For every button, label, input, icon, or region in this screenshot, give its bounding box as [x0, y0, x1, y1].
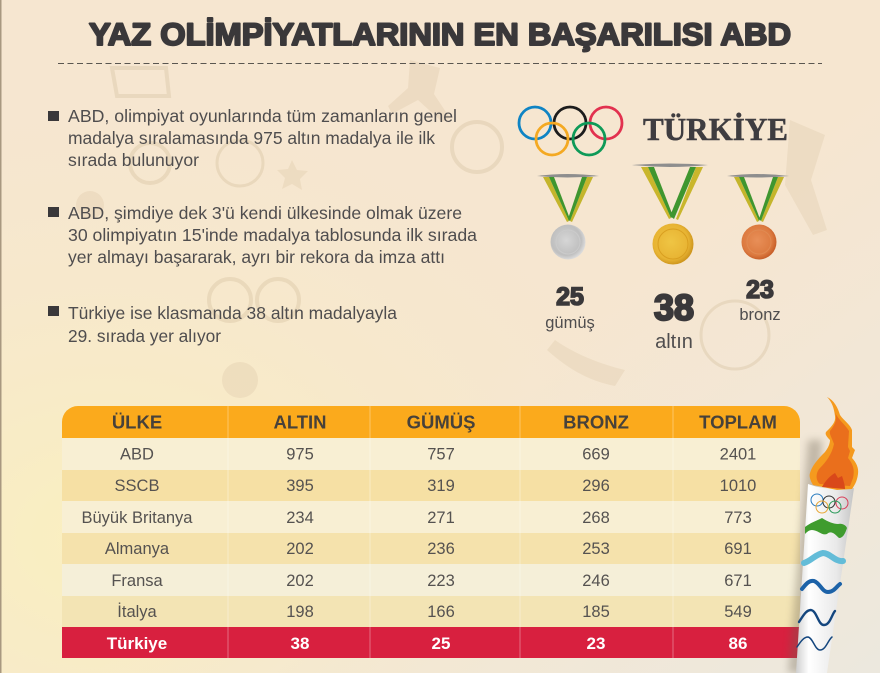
row: Almanya: 202 [286, 540, 314, 558]
row: İtalya: 198 [286, 603, 314, 621]
medal table [62, 406, 800, 658]
row: Türkiye: 23 [587, 634, 605, 653]
bullet 1 [48, 106, 457, 170]
bullet 1: sırada bulunuyor [68, 150, 199, 170]
torch water waves [797, 553, 843, 650]
medal count: silver [545, 283, 595, 332]
row: Fransa: Fransa [111, 572, 163, 590]
row: İtalya [62, 596, 800, 627]
row: Büyük Britanya: 271 [427, 509, 455, 527]
medal count: silver: 25 [556, 283, 584, 311]
row: Türkiye [62, 627, 800, 658]
title: YAZ OLİMPİYATLARININ EN BAŞARILISI ABD [89, 16, 791, 52]
row: Fransa: 202 [286, 572, 314, 590]
row: Fransa [62, 564, 800, 596]
row: ABD [62, 438, 800, 470]
row: Almanya: 236 [427, 540, 455, 558]
heading: Türkiye: TÜRKİYE [643, 111, 788, 147]
row: Büyük Britanya: Büyük Britanya [82, 509, 193, 527]
row: Fransa: 223 [427, 572, 455, 590]
bullet 3: 29. sırada yer alıyor [68, 326, 221, 346]
row: ABD: 757 [427, 446, 455, 464]
bullet 2 [48, 203, 477, 267]
table header: GÜMÜŞ [407, 412, 475, 432]
bullet 1: madalya sıralamasında 975 altın madalya ile ilk [68, 128, 435, 148]
bullet 2: 30 olimpiyatın 15'inde madalya tablosunda ilk sırada [68, 225, 477, 245]
torch rings [811, 494, 848, 513]
medal count: gold: altın [655, 331, 693, 353]
table header: TOPLAM [699, 412, 777, 432]
bullet list [48, 106, 477, 346]
bullet 2: yer almayı başararak, ayrı bir rekora da imza attı [68, 247, 445, 267]
medal count: bronze: 23 [746, 276, 774, 304]
medal: silver [537, 174, 599, 260]
row: İtalya: 185 [582, 603, 610, 621]
row: Büyük Britanya: 234 [286, 509, 314, 527]
row: Büyük Britanya: 773 [724, 509, 752, 527]
flame [810, 397, 858, 490]
row: ABD: 2401 [720, 446, 756, 464]
bullet 3: Türkiye ise klasmanda 38 altın madalyayla [68, 303, 397, 323]
torch shadow [788, 440, 822, 673]
table header: ALTIN [273, 412, 327, 432]
row: İtalya: 166 [427, 603, 455, 621]
row: Fransa: 246 [582, 572, 610, 590]
bullet 2: ABD, şimdiye dek 3'ü kendi ülkesinde olmak üzere [68, 203, 462, 223]
table header [62, 406, 800, 438]
background sport silhouettes [76, 60, 827, 540]
title divider [58, 62, 822, 64]
row: Almanya: 691 [724, 540, 752, 558]
row: Türkiye: Türkiye [107, 634, 167, 653]
torch [788, 397, 858, 673]
torch handle [796, 484, 854, 673]
row: SSCB: 319 [427, 477, 455, 495]
row: SSCB [62, 470, 800, 501]
row: Fransa: 671 [724, 572, 752, 590]
table header: ÜLKE [112, 412, 162, 432]
medal count: bronze: bronz [739, 306, 781, 324]
row: Türkiye: 38 [291, 634, 309, 653]
torch green band [805, 518, 847, 538]
row: ABD: 975 [286, 446, 314, 464]
row: SSCB: SSCB [115, 477, 159, 495]
bullet 3 [48, 303, 397, 346]
medal count: gold [654, 287, 694, 353]
row: İtalya: İtalya [117, 602, 158, 621]
bullet 1: ABD, olimpiyat oyunlarında tüm zamanların genel [68, 106, 457, 126]
row: Büyük Britanya: 268 [582, 509, 610, 527]
row: İtalya: 549 [724, 603, 752, 621]
medal: bronze [727, 174, 789, 260]
row: ABD: ABD [120, 446, 154, 464]
row: SSCB: 1010 [720, 477, 756, 495]
row: Almanya: Almanya [105, 540, 170, 558]
row: Türkiye: 25 [432, 634, 450, 653]
row: Büyük Britanya [62, 501, 800, 533]
medal count: gold: 38 [654, 287, 694, 328]
medal count: bronze [739, 276, 781, 324]
row: ABD: 669 [582, 446, 610, 464]
table header: BRONZ [563, 412, 629, 432]
row: SSCB: 296 [582, 477, 610, 495]
icon: olympic rings [519, 107, 622, 155]
medal: gold [632, 164, 708, 264]
row: Almanya [62, 533, 800, 564]
row: Almanya: 253 [582, 540, 610, 558]
row: Türkiye: 86 [729, 634, 747, 653]
medal count: silver: gümüş [545, 314, 595, 332]
row: SSCB: 395 [286, 477, 314, 495]
